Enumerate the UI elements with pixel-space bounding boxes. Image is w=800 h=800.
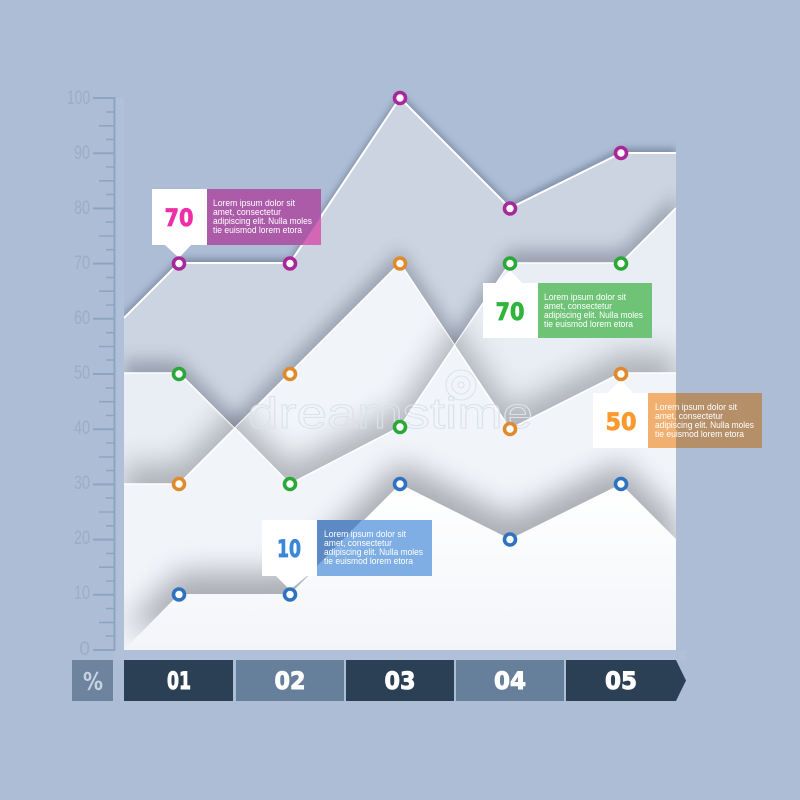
y axis labels: 50: [74, 363, 90, 384]
y axis labels: 60: [74, 308, 90, 329]
callout: orange 50: [593, 380, 762, 448]
cell 03: 03: [384, 667, 416, 695]
layered area chart: [124, 93, 676, 650]
callout: orange 50: adipiscing elit. Nulla moles: [655, 420, 754, 431]
callout: purple 70: tie euismod lorem etora: [213, 225, 303, 236]
callout: orange 50: 50: [606, 408, 636, 436]
callout: purple 70: 70: [164, 204, 194, 232]
percent cell: %: [83, 667, 103, 696]
cell 02: [236, 660, 344, 701]
y axis labels: 90: [74, 143, 90, 164]
y axis labels: 40: [74, 418, 90, 439]
y axis labels: 100: [67, 88, 90, 109]
cell 01: 01: [167, 667, 191, 695]
callout: purple 70: [152, 189, 321, 258]
y axis labels: 20: [74, 528, 90, 549]
cell 05 arrow: 05: [605, 667, 637, 695]
callout: blue 10: amet, consectetur: [324, 538, 392, 549]
cell 03: [346, 660, 454, 701]
green series area: [124, 196, 676, 484]
blue series markers: [174, 478, 626, 600]
plot base strip: [114, 98, 686, 660]
watermark: dreamstime: [248, 389, 533, 438]
callout: blue 10: Lorem ipsum dolor sit: [324, 529, 406, 540]
callout: green 70: amet, consectetur: [544, 301, 612, 312]
callout: green 70: 70: [496, 298, 524, 326]
callout: green 70: tie euismod lorem etora: [544, 319, 634, 330]
cell 01: [124, 660, 233, 701]
purple series markers: [174, 92, 626, 269]
callout: blue 10: tie euismod lorem etora: [324, 556, 414, 567]
orange series markers: [174, 258, 626, 490]
purple series area: [124, 96, 676, 427]
green series markers: [174, 258, 626, 490]
y axis ruler: [67, 88, 114, 660]
infographic canvas: [68, 90, 762, 701]
x axis bar: [72, 660, 686, 701]
y axis labels: 0: [79, 639, 90, 660]
cell 05 arrow: [566, 660, 686, 701]
callout: purple 70: amet, consectetur: [213, 207, 281, 218]
watermark: [248, 370, 533, 438]
y axis labels: 10: [74, 583, 90, 604]
percent cell: [72, 660, 113, 701]
green series overlap over orange: [235, 322, 454, 481]
callout: orange 50: Lorem ipsum dolor sit: [655, 402, 737, 413]
cell 04: [456, 660, 564, 701]
y axis labels: 30: [74, 473, 90, 494]
cell 02: 02: [274, 667, 306, 695]
y axis labels: 80: [74, 198, 90, 219]
cell 04: 04: [494, 667, 526, 695]
y axis labels: 70: [74, 253, 90, 274]
callout: blue 10: adipiscing elit. Nulla moles: [324, 547, 423, 558]
callout: orange 50: tie euismod lorem etora: [655, 429, 745, 440]
blue series area: [124, 462, 676, 650]
orange series area: [124, 268, 676, 485]
callout: green 70: [483, 270, 652, 338]
callout: orange 50: amet, consectetur: [655, 411, 723, 422]
callout: purple 70: Lorem ipsum dolor sit: [213, 198, 295, 209]
y axis labels: [67, 88, 90, 660]
callout: blue 10: [262, 520, 432, 590]
callout: blue 10: 10: [277, 535, 301, 563]
callout: green 70: adipiscing elit. Nulla moles: [544, 310, 643, 321]
callout: green 70: Lorem ipsum dolor sit: [544, 292, 626, 303]
callout: purple 70: adipiscing elit. Nulla moles: [213, 216, 312, 227]
